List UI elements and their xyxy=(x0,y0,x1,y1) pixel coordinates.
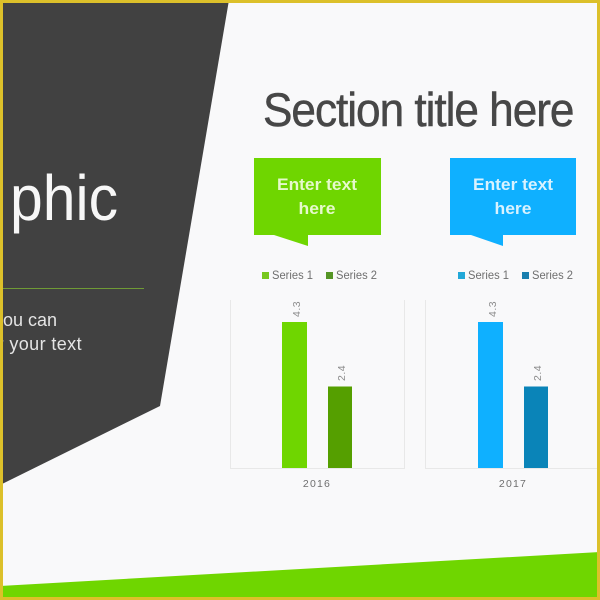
bar chart: 2016: 2016 xyxy=(303,478,331,490)
callout: green speech box xyxy=(254,158,381,246)
heading: section title: Section title here xyxy=(263,84,573,136)
callout: blue speech box: here xyxy=(494,199,532,218)
callout: blue speech box xyxy=(450,158,576,246)
legend: series 1 and 2: Series 1 xyxy=(272,270,313,282)
legend: series 1 and 2 xyxy=(262,270,377,282)
legend: series 1 and 2: Series 2 xyxy=(336,270,377,282)
panel: dark title panel xyxy=(0,0,229,485)
callout: green speech box: Enter text xyxy=(277,175,357,194)
bar chart: 2016: 2.4 xyxy=(336,365,348,381)
bar chart: 2016 xyxy=(230,300,404,490)
bar chart: 2017: 2017 xyxy=(499,478,527,490)
legend: series 1 and 2: Series 1 xyxy=(468,270,509,282)
legend: series 1 and 2 xyxy=(458,270,573,282)
bar chart: 2017: 2.4 xyxy=(532,365,544,381)
callout: green speech box: here xyxy=(298,199,336,218)
callout: blue speech box: Enter text xyxy=(473,175,553,194)
legend: series 1 and 2: Series 2 xyxy=(532,270,573,282)
panel: 2017 column xyxy=(426,158,597,490)
green footer band xyxy=(0,552,600,600)
heading: cropped title word: phic xyxy=(10,162,118,234)
text block: cropped description xyxy=(0,310,82,354)
bar chart: 2016: 4.3 xyxy=(291,301,303,317)
green divider line xyxy=(0,288,144,289)
bar chart: 2017 xyxy=(426,300,597,490)
bar chart: 2017: 4.3 xyxy=(487,301,499,317)
panel: 2016 column xyxy=(230,158,404,490)
